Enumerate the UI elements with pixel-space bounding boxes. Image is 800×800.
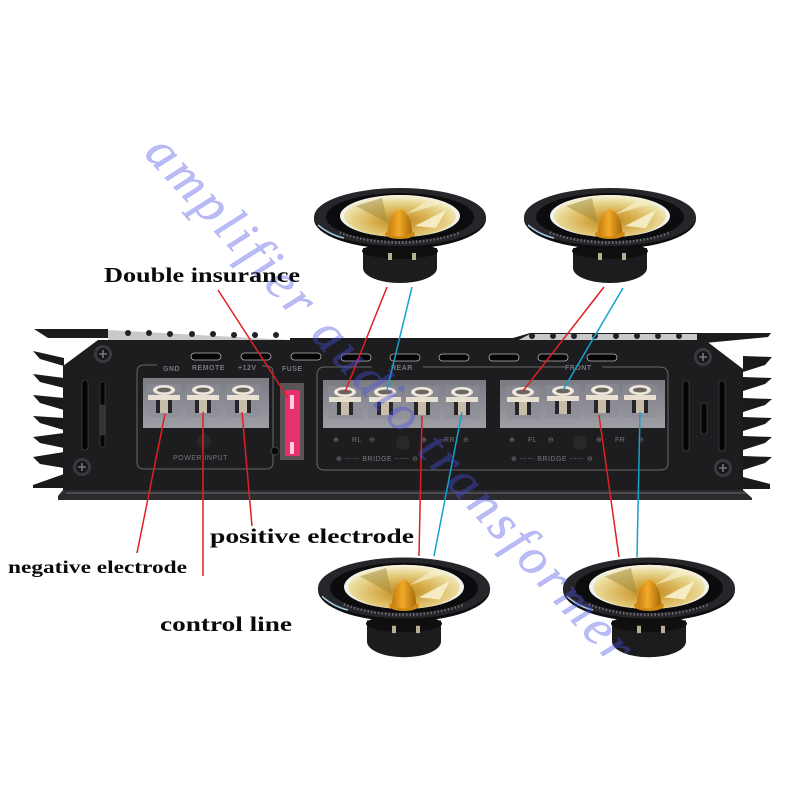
panel: rear and front outputs xyxy=(317,365,668,470)
panel: power input: REMOTE xyxy=(192,365,225,372)
panel: rear and front outputs: ⊕ xyxy=(421,437,427,444)
watermark: amplifier audio transformer xyxy=(134,124,646,675)
amplifier faceplate xyxy=(63,340,743,493)
panel: rear and front outputs: ⊖ xyxy=(638,437,644,444)
panel: rear and front outputs: ⊖ xyxy=(463,437,469,444)
panel: power input: POWER INPUT xyxy=(173,455,228,462)
top slots xyxy=(191,353,617,361)
speaker: rear bottom xyxy=(318,558,490,657)
speaker: front top xyxy=(524,188,696,283)
panel: rear and front outputs: ⊕ xyxy=(509,437,515,444)
left heat sink fins xyxy=(33,351,64,488)
vent slots xyxy=(82,380,725,451)
label: positive electrode: positive electrode xyxy=(210,524,414,548)
wiring lines xyxy=(137,287,640,576)
panel: power input: +12V xyxy=(238,365,257,372)
right heat sink fins xyxy=(743,356,772,489)
fuse xyxy=(271,366,304,460)
speaker: rear top xyxy=(314,188,486,283)
panel: rear and front outputs: RR xyxy=(444,437,455,444)
panel: rear and front outputs: ⊕ xyxy=(333,437,339,444)
label: negative electrode: negative electrode xyxy=(8,557,187,577)
panel: rear and front outputs: ⊖ xyxy=(548,437,554,444)
panel: rear and front outputs: ⊖ xyxy=(369,437,375,444)
panel: rear and front outputs: REAR xyxy=(391,365,413,372)
panel: rear and front outputs: RL xyxy=(352,437,362,444)
speaker: front bottom xyxy=(563,558,735,657)
bottom lip xyxy=(58,490,752,500)
amplifier xyxy=(33,329,772,500)
top flanges xyxy=(34,329,771,343)
label: double insurance: Double insurance xyxy=(104,263,300,287)
panel: power input xyxy=(137,365,273,469)
panel: rear and front outputs: FR xyxy=(615,437,625,444)
panel: power input: GND xyxy=(163,366,180,373)
corner screws xyxy=(73,345,732,477)
panel: rear and front outputs: FRONT xyxy=(565,365,592,372)
panel: rear and front outputs: FL xyxy=(528,437,537,444)
fuse: FUSE xyxy=(282,366,303,373)
panel: rear and front outputs: ⊕ ⋯⋯ BRIDGE ⋯⋯ ⊖ xyxy=(336,456,418,463)
panel: rear and front outputs: ⊕ xyxy=(596,437,602,444)
panel: rear and front outputs: ⊕ ⋯⋯ BRIDGE ⋯⋯ ⊖ xyxy=(511,456,593,463)
label: control line: control line xyxy=(160,612,292,636)
